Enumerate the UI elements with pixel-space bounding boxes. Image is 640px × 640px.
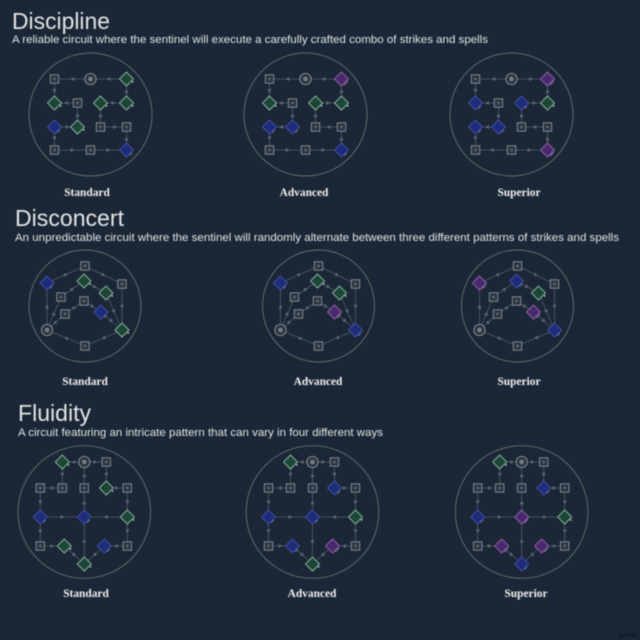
square nodes	[36, 458, 131, 550]
diamond: blue lower right	[348, 323, 362, 337]
start node	[307, 456, 318, 468]
diamond: blue top	[510, 274, 524, 288]
square nodes	[489, 262, 559, 350]
diagram: Discipline Superior	[450, 53, 573, 176]
diamond: green top	[310, 274, 324, 288]
connectors	[54, 79, 126, 150]
connectors	[47, 266, 122, 346]
heading: Fluidity: Fluidity	[18, 400, 91, 426]
diamond: green upper right	[532, 286, 546, 300]
diamond: blue bottom	[515, 557, 529, 571]
diamond: green bottom	[77, 557, 91, 571]
diagram: Disconcert Advanced	[262, 250, 374, 362]
diamond: blue centre	[77, 510, 91, 524]
diamond: green right	[348, 510, 362, 524]
diamond: green upper right	[120, 96, 134, 110]
square nodes	[57, 262, 126, 350]
diamond: purple lower right	[326, 539, 340, 553]
diamond: blue lower right	[97, 539, 111, 553]
diamond: green top	[284, 455, 298, 469]
ring	[462, 250, 574, 362]
diamond: purple centre	[526, 305, 540, 319]
diamond: blue lower middle	[286, 120, 300, 134]
connectors	[270, 79, 342, 150]
diamond: purple left	[472, 276, 486, 290]
square nodes	[471, 75, 552, 154]
diamond: purple centre	[515, 510, 529, 524]
diamond: blue bottom right	[120, 143, 134, 157]
ring	[29, 250, 141, 362]
diamond: blue centre	[306, 510, 320, 524]
description: Disconcert: An unpredictable circuit where the sentinel will randomly alternate between three different patterns of strikes and spells	[15, 232, 619, 244]
connectors	[40, 462, 127, 564]
diamond: green lower right	[115, 323, 129, 337]
diamond: blue centre	[94, 305, 108, 319]
start node	[516, 456, 527, 468]
start node	[85, 73, 96, 85]
diamond: blue upper right	[537, 481, 551, 495]
connectors	[476, 79, 548, 150]
start node	[275, 324, 286, 336]
diamond: blue bottom right	[334, 143, 348, 157]
diamond: green top	[493, 455, 507, 469]
ring	[450, 53, 573, 176]
start node	[300, 73, 311, 85]
diamond: blue lower left	[48, 120, 62, 134]
panel: Disconcert	[15, 205, 619, 388]
ring	[455, 446, 588, 578]
diamond: blue lower left	[262, 120, 276, 134]
diamond: green lower left	[57, 539, 71, 553]
diamond: blue lower right	[548, 323, 562, 337]
diamond: green right	[120, 510, 134, 524]
label: Advanced: Advanced	[288, 588, 337, 600]
diamond: green top	[77, 274, 91, 288]
start node	[474, 324, 485, 336]
diagram: Discipline Standard	[29, 53, 152, 176]
diagram: Fluidity Standard	[18, 446, 151, 578]
diamond: purple top right	[540, 72, 554, 86]
diagram: Fluidity Advanced	[246, 446, 379, 578]
ring	[244, 53, 367, 176]
square nodes	[474, 458, 569, 550]
diamond: green upper right	[99, 481, 113, 495]
diamond: blue upper left	[468, 96, 482, 110]
square nodes	[50, 75, 131, 154]
diagram: Fluidity Superior	[455, 446, 588, 578]
start node	[41, 324, 53, 336]
start node	[506, 73, 517, 85]
connectors	[480, 266, 554, 346]
diamond: purple lower left	[495, 539, 509, 553]
diamond: green top right	[120, 72, 134, 86]
diamond: green lower middle	[70, 120, 84, 134]
diamond: purple top right	[334, 72, 348, 86]
panel: Discipline	[12, 8, 573, 199]
label: Standard: Standard	[62, 376, 108, 388]
connectors	[280, 266, 356, 346]
diamond: blue lower middle	[492, 120, 506, 134]
diamond: green upper left	[48, 96, 62, 110]
heading: Disconcert: Disconcert	[15, 205, 125, 231]
panel: Fluidity	[18, 400, 588, 600]
square nodes	[265, 75, 346, 154]
ring	[246, 446, 379, 578]
label: Advanced: Advanced	[280, 187, 329, 199]
diagram: Discipline Advanced	[244, 53, 367, 176]
diamond: blue left	[33, 510, 47, 524]
label: Superior: Superior	[504, 588, 548, 600]
diamond: green top	[55, 455, 69, 469]
diamond: blue lower left	[468, 120, 482, 134]
ring	[29, 53, 152, 176]
label: Standard: Standard	[64, 187, 110, 199]
diamond: purple centre	[328, 305, 342, 319]
connectors	[268, 462, 356, 564]
square nodes	[290, 262, 360, 350]
diamond: blue upper middle	[514, 96, 528, 110]
connectors	[478, 462, 565, 564]
diamond: blue lower left	[286, 539, 300, 553]
start node	[79, 456, 90, 468]
diamond: blue left	[471, 510, 485, 524]
watermark: game	[618, 630, 637, 639]
diamond: green upper right	[540, 96, 554, 110]
diamond: green upper right	[334, 96, 348, 110]
label: Superior: Superior	[497, 376, 541, 388]
ring	[18, 446, 151, 578]
diamond: blue left	[262, 510, 276, 524]
label: Superior: Superior	[497, 187, 541, 199]
diamond: blue left	[40, 276, 54, 290]
diamond: blue left	[274, 276, 288, 290]
diamond: green upper right	[99, 286, 113, 300]
diamond: green bottom	[306, 557, 320, 571]
diamond: purple bottom right	[540, 143, 554, 157]
diamond: green upper middle	[308, 96, 322, 110]
label: Standard: Standard	[63, 588, 109, 600]
diamond: green upper right	[332, 286, 346, 300]
description: Fluidity: A circuit featuring an intricate pattern that can vary in four different ways	[18, 427, 383, 439]
diamond: green upper left	[262, 96, 276, 110]
diamond: green upper middle	[94, 96, 108, 110]
diamond: blue upper right	[328, 481, 342, 495]
diamond: purple lower right	[535, 539, 549, 553]
square nodes	[264, 458, 360, 550]
diagram: Disconcert Superior	[462, 250, 574, 362]
ring	[262, 250, 374, 362]
label: Advanced: Advanced	[294, 376, 343, 388]
description: Discipline: A reliable circuit where the sentinel will execute a carefully crafted combo of strikes and spells	[12, 34, 488, 46]
heading: Discipline: Discipline	[12, 8, 110, 34]
diamond: green right	[558, 510, 572, 524]
diagram: Disconcert Standard	[29, 250, 141, 362]
